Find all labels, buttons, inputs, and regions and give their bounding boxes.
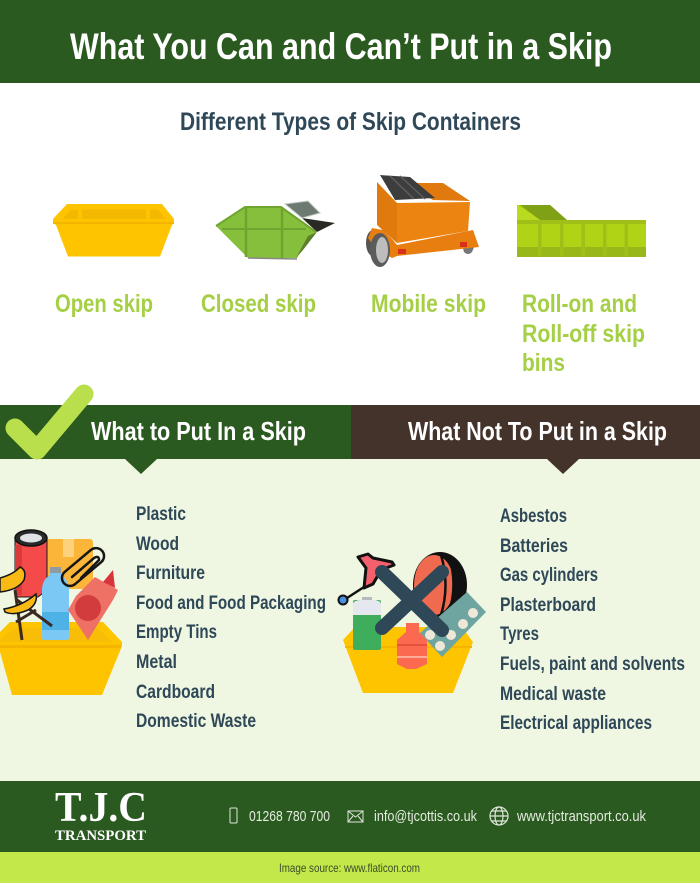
- logo: T.J.C Transport: TRANSPORT: [55, 828, 146, 844]
- icon: tyre: [413, 552, 467, 618]
- list: allowed items: Plastic: [136, 504, 186, 525]
- list: allowed items: Empty Tins: [136, 622, 217, 643]
- label: roll-on and roll-off skip bins: Roll-on and: [522, 290, 637, 318]
- footer: image source bar: Image source: www.flaticon.com: [279, 861, 420, 875]
- contact: phone number: 01268 780 700: [249, 808, 330, 825]
- footer: image source bar: [0, 852, 700, 883]
- list: prohibited items: Tyres: [500, 624, 539, 645]
- list: allowed items: Food and Food Packaging: [136, 593, 326, 614]
- panel: roll-on roll-off skip: [517, 205, 646, 377]
- illustration: prohibited items in skip: [338, 552, 486, 693]
- icon: phone: [230, 808, 237, 823]
- banner: what to put in a skip: [0, 405, 351, 474]
- icon: yellow skip: [0, 622, 122, 695]
- contact: website: www.tjctransport.co.uk: [516, 808, 646, 825]
- icon: water bottle: [42, 567, 69, 640]
- list: prohibited items: Gas cylinders: [500, 565, 598, 586]
- icon: gas cylinder: [397, 623, 427, 669]
- label: mobile skip: Mobile skip: [371, 290, 486, 318]
- list: prohibited items: [500, 506, 685, 734]
- heading: skip container types: Different Types of Skip Containers: [180, 108, 521, 136]
- list: prohibited items: Batteries: [500, 536, 568, 557]
- panel: open skip: [53, 204, 174, 318]
- panel: mobile skip: [366, 175, 486, 318]
- list: allowed items: Cardboard: [136, 682, 215, 703]
- list: prohibited items: Plasterboard: [500, 595, 596, 616]
- icon: spray nozzle: [338, 554, 394, 604]
- label: roll-on and roll-off skip bins: [522, 290, 645, 377]
- banner: what to put in a skip: What to Put In a Skip: [91, 416, 306, 446]
- list: allowed items: Metal: [136, 652, 177, 673]
- icon: yellow skip: [343, 627, 473, 693]
- label: closed skip: Closed skip: [201, 290, 316, 318]
- panel: closed skip: [201, 201, 335, 318]
- icon: mobile skip: [366, 175, 479, 267]
- logo: T.J.C Transport: T.J.C: [55, 785, 147, 831]
- icon: cross mark: [382, 572, 442, 630]
- label: open skip: Open skip: [55, 290, 153, 318]
- list: prohibited items: Electrical appliances: [500, 713, 652, 734]
- icon: open skip: [53, 204, 174, 256]
- icon: paper clip: [59, 545, 107, 589]
- icon: closed skip: [216, 201, 335, 259]
- list: allowed items: Furniture: [136, 563, 205, 584]
- banner: what not to put in a skip: [351, 405, 700, 474]
- list: allowed items: [136, 504, 326, 732]
- icon: soda can: [15, 530, 47, 597]
- icon: wooden chair: [0, 567, 52, 640]
- icon: envelope: [348, 811, 363, 822]
- icon: cardboard box: [47, 539, 93, 589]
- contact: email: info@tjcottis.co.uk: [374, 808, 477, 825]
- label: roll-on and roll-off skip bins: bins: [522, 349, 565, 377]
- label: roll-on and roll-off skip bins: Roll-off skip: [522, 320, 645, 348]
- list: prohibited items: Medical waste: [500, 684, 606, 705]
- icon: roll-on roll-off skip: [517, 205, 646, 257]
- icon: ketchup bottle: [68, 570, 118, 640]
- list: prohibited items: Asbestos: [500, 506, 567, 527]
- icon: paint bottle: [353, 597, 381, 650]
- panel: lists background: [0, 459, 700, 781]
- footer: contact bar: [0, 781, 700, 852]
- icon: check mark: [15, 394, 84, 450]
- title banner: [0, 0, 700, 83]
- list: allowed items: Domestic Waste: [136, 711, 256, 732]
- illustration: allowed items in skip: [0, 530, 122, 695]
- list: allowed items: Wood: [136, 534, 179, 555]
- icon: globe: [490, 807, 508, 825]
- icon: pills blister: [420, 592, 486, 657]
